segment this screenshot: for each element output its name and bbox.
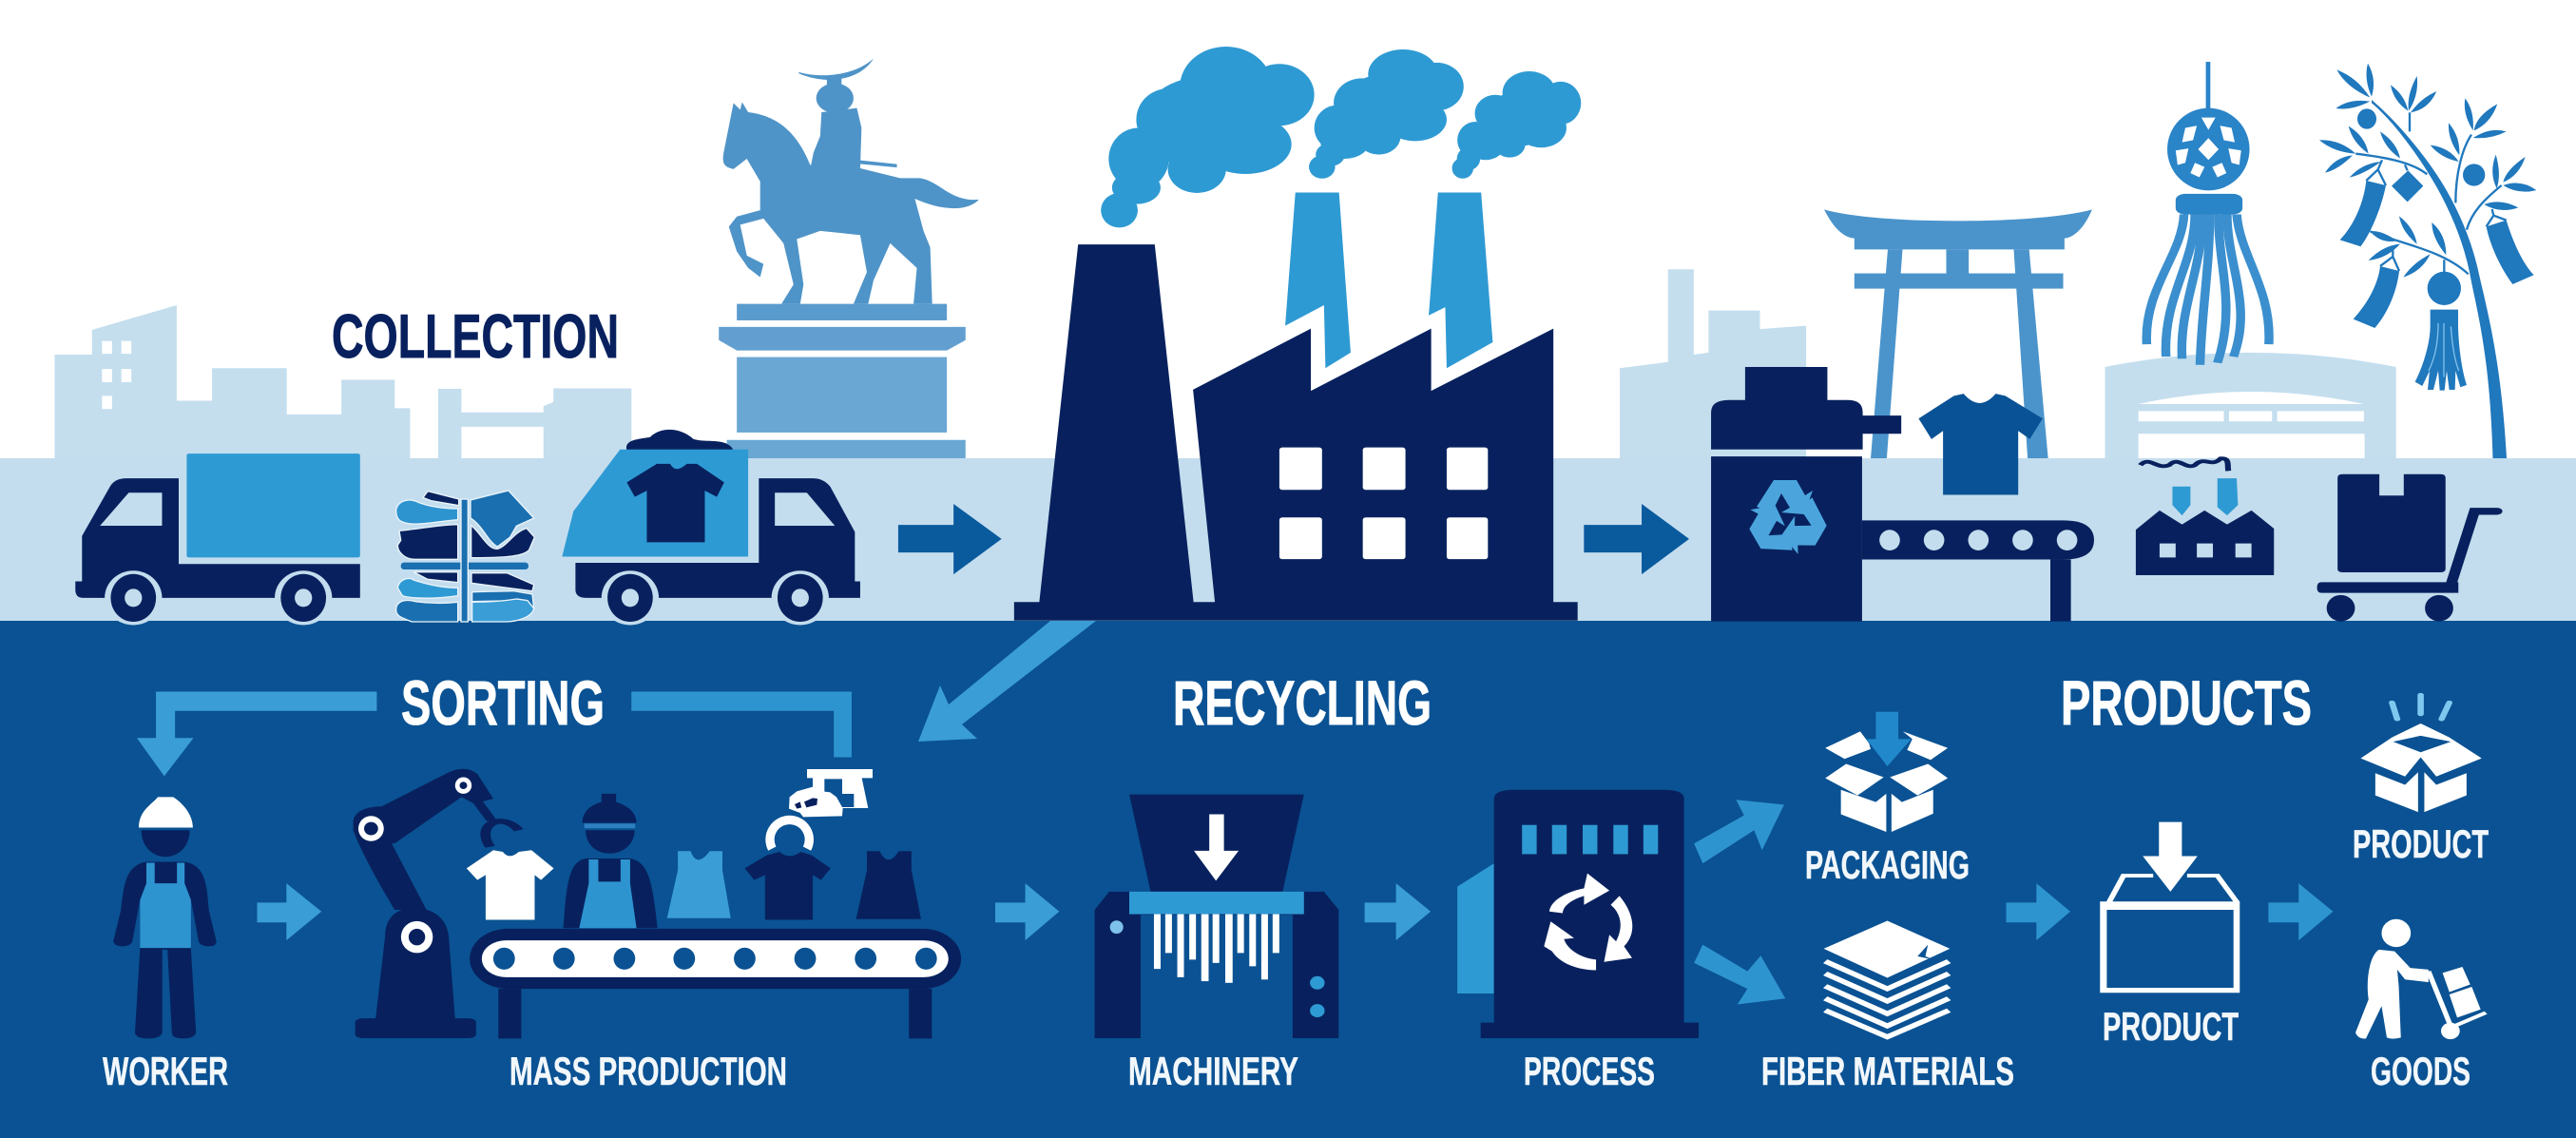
label: product center: PRODUCT (2103, 1004, 2239, 1049)
icon: open product box with sparks (2361, 695, 2482, 812)
arrow: machinery to process (1365, 883, 1431, 940)
left city skyline (55, 305, 631, 462)
arrow: product to outputs (2268, 883, 2333, 940)
icon: box truck (75, 453, 360, 625)
arrow: trucks to factory (898, 504, 1002, 574)
line: sorting bracket right (631, 691, 852, 758)
icon: fiber material stack (1824, 921, 1950, 1037)
torii gate (1824, 209, 2092, 462)
label: process: PROCESS (1524, 1049, 1655, 1093)
icon: processing machine (1457, 790, 1699, 1038)
icon: packaging box (1825, 712, 1948, 832)
heading: recycling: RECYCLING (1173, 667, 1432, 738)
tanabata bamboo tree (2319, 64, 2536, 463)
kusudama festival decoration (2146, 62, 2269, 365)
label: machinery: MACHINERY (1128, 1049, 1298, 1093)
label: fiber materials: FIBER MATERIALS (1761, 1049, 2014, 1093)
icon: recycling machine with conveyor (1711, 367, 2094, 622)
heading: collection: COLLECTION (332, 301, 619, 371)
icon: circular process arrows (1544, 874, 1632, 971)
icon: worker (113, 797, 217, 1038)
heading: sorting: SORTING (401, 667, 605, 738)
arrow: process to packaging (1694, 800, 1784, 863)
heading: products: PRODUCTS (2061, 667, 2312, 738)
icon: white robotic gripper (770, 769, 873, 849)
arrow: production to machinery (995, 883, 1059, 940)
icon: product box outline (2100, 822, 2240, 993)
arrow: process to fiber materials (1694, 945, 1785, 1004)
arrow: factory to recycler (1584, 504, 1689, 574)
icon: conveyor belt (470, 929, 961, 1038)
icon: white t-shirt (467, 850, 554, 919)
icon: hand cart with box (2317, 474, 2497, 622)
warehouse silhouette (2105, 353, 2396, 462)
label: mass production: MASS PRODUCTION (509, 1049, 787, 1093)
light ground band (0, 458, 2576, 622)
icon: bundled clothes pile (396, 491, 534, 622)
arrow: sorting bracket left (137, 691, 376, 776)
icon: garments on conveyor (667, 851, 921, 919)
icon: robot arm (354, 769, 519, 1038)
icon: factory with chimneys (1014, 193, 1578, 621)
icon: recycled t-shirt (1918, 394, 2043, 494)
icon: recycling symbol (1741, 480, 1836, 564)
arrow: factory down to sorting (918, 621, 1096, 742)
icon: person with hand truck (2355, 919, 2486, 1039)
icon: shredder machinery (1095, 795, 1338, 1038)
icon: small factory (2136, 458, 2274, 575)
right factory skyline (1620, 269, 1806, 462)
samurai equestrian statue (719, 59, 979, 460)
label: product right: PRODUCT (2353, 821, 2489, 866)
label: packaging: PACKAGING (1805, 842, 1970, 887)
arrow: worker to production (258, 883, 321, 940)
icon: line worker (564, 794, 658, 928)
arrow: materials to product (2007, 883, 2070, 940)
lower dark panel background (0, 621, 2576, 1138)
icon: collection truck with shirt (562, 430, 860, 625)
icon: smoke clouds (1101, 47, 1581, 227)
label: worker: WORKER (103, 1049, 228, 1093)
label: goods: GOODS (2371, 1049, 2470, 1093)
